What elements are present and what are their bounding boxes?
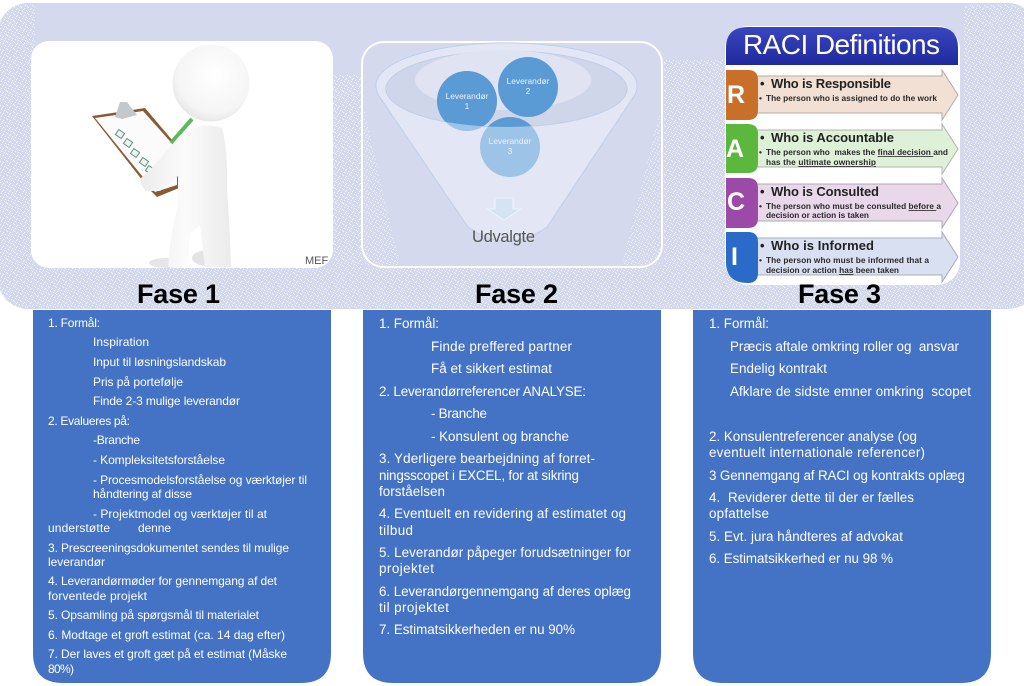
- row: Responsible: •: [759, 93, 762, 103]
- supplier 1 circle: 1: [465, 101, 470, 111]
- panel: Fase 3 text: eventuelt internationale referencer): [709, 445, 925, 460]
- panel: Fase 2 text: Finde preffered partner: [431, 339, 573, 354]
- row: Informed: [726, 232, 958, 283]
- row: Consulted: [726, 178, 958, 228]
- speckled funnel sides: [364, 110, 660, 265]
- funnel opening: [386, 51, 627, 127]
- row: Consulted: The person who must be consulted before a: [766, 201, 941, 211]
- row: Accountable: Who is Accountable: [771, 130, 894, 145]
- supplier 3 circle: 3: [508, 146, 513, 156]
- panel: Fase 1 text: forventede projekt: [48, 589, 148, 603]
- row: Informed: decision or action has been taken: [766, 265, 899, 275]
- panel: Fase 1 text: 5. Opsamling på spørgsmål til materialet: [48, 608, 260, 622]
- panel: Fase 1 text: - Projektmodel og værktøjer til at: [93, 507, 268, 521]
- row: Accountable: has the ultimate ownership: [766, 157, 876, 167]
- supplier 1 circle: Leverandør: [446, 91, 489, 101]
- panel: Fase 1 text: Input til løsningslandskab: [93, 355, 226, 369]
- title: Fase 3: Fase 3: [798, 279, 881, 309]
- row: Consulted: Who is Consulted: [771, 184, 879, 199]
- panel: Fase 2 text: ningsscopet i EXCEL, for at sikring: [379, 468, 579, 483]
- title: Fase 2: Fase 2: [475, 279, 558, 309]
- row: Informed: •: [759, 255, 762, 265]
- panel: Fase 2 text: forståelsen: [379, 484, 445, 499]
- panel: Fase 3 text: 1. Formål:: [709, 316, 769, 331]
- panel: Fase 2 funnel: [362, 42, 662, 267]
- panel: Fase 2 text: Få et sikkert estimat: [431, 361, 552, 376]
- row: Informed: Who is Informed: [771, 238, 874, 253]
- icon: clipboard: [92, 102, 192, 197]
- panel: Fase 1 text: 6. Modtage et groft estimat (ca. 14 dag efter): [48, 628, 285, 642]
- panel: Fase 2 text: - Branche: [431, 406, 487, 421]
- panel: Fase 1 text: leverandør: [48, 555, 105, 569]
- panel: Fase 2 text: 4. Eventuelt en revidering af estimatet og: [379, 506, 626, 521]
- panel: Fase 3 text: 6. Estimatsikkerhed er nu 98 %: [709, 551, 893, 566]
- panel: Fase 1 text: -Branche: [93, 433, 140, 447]
- panel: Fase 2 text: 3. Yderligere bearbejdning af forret-: [379, 451, 595, 466]
- label: Udvalgte: Udvalgte: [472, 228, 535, 246]
- row: Accountable: A: [726, 135, 744, 163]
- panel: Fase 2 text: [363, 310, 661, 683]
- row: Responsible: Who is Responsible: [771, 76, 891, 91]
- supplier 3 circle: [480, 117, 540, 177]
- panel: Fase 1 text: Inspiration: [93, 335, 149, 349]
- row: Accountable: •: [760, 130, 765, 145]
- arrow: down: [487, 198, 521, 220]
- row: Responsible: •: [760, 76, 765, 91]
- panel: Fase 3 text: 4. Reviderer dette til der er fælles: [709, 490, 914, 505]
- row: Accountable: •: [759, 147, 762, 157]
- panel: Fase 2 text: 2. Leverandørreferencer ANALYSE:: [379, 384, 586, 399]
- panel: Fase 3 text: Afklare de sidste emner omkring scopet: [730, 384, 971, 399]
- icon: white figure: [141, 44, 250, 268]
- row: Informed: The person who must be informed that a: [766, 255, 929, 265]
- row: Consulted: •: [760, 184, 765, 199]
- panel: Fase 2 text: til projektet: [379, 600, 449, 615]
- panel: Fase 3 text: Endelig kontrakt: [730, 361, 827, 376]
- supplier 2 circle: Leverandør: [507, 76, 550, 86]
- row: Consulted: decision or action is taken: [766, 210, 869, 220]
- title: Fase 1: Fase 1: [137, 279, 220, 309]
- panel: Fase 1 text: - Procesmodelsforståelse og værktøjer til: [93, 473, 307, 487]
- panel: Fase 1 text: [33, 310, 331, 683]
- panel: Fase 1 illustration: [31, 41, 333, 268]
- panel: Fase 1 text: håndtering af disse: [93, 487, 192, 501]
- panel: Fase 3 text: opfattelse: [709, 506, 769, 521]
- row: Informed: I: [731, 243, 738, 271]
- panel: Fase 2 text: 1. Formål:: [379, 316, 439, 331]
- panel: Fase 1 text: denne: [138, 521, 171, 535]
- panel: Fase 1 text: 80%): [48, 662, 74, 676]
- panel: Fase 1 text: 2. Evalueres på:: [48, 414, 130, 428]
- panel: Fase 2 text: projektet: [379, 561, 434, 576]
- row: Responsible: The person who is assigned to do the work: [766, 93, 937, 103]
- RACI header: [726, 27, 958, 65]
- panel: Fase 1 text: 3. Prescreeningsdokumentet sendes til mulige: [48, 541, 289, 555]
- supplier 2 circle: 2: [526, 86, 531, 96]
- row: Informed: •: [760, 238, 765, 253]
- background banner: [0, 3, 1024, 309]
- panel: Fase 3 text: 2. Konsulentreferencer analyse (og: [709, 429, 917, 444]
- panel: Fase 1 text: 4. Leverandørmøder for gennemgang af det: [48, 574, 278, 588]
- panel: Fase 1 text: Pris på portefølje: [93, 375, 183, 389]
- supplier 1 circle: [437, 71, 497, 131]
- panel: Fase 1 text: 1. Formål:: [48, 316, 100, 330]
- panel: Fase 3 text: 3 Gennemgang af RACI og kontrakts oplæg: [709, 468, 965, 483]
- row: Accountable: [726, 124, 958, 174]
- panel: Fase 2 text: tilbud: [379, 523, 413, 538]
- panel: Fase 2 text: - Konsulent og branche: [431, 429, 569, 444]
- row: Consulted: •: [759, 201, 762, 211]
- panel: Fase 1 text: understøtte: [48, 521, 110, 535]
- row: Responsible: [726, 70, 958, 120]
- panel: Fase 2 text: 6. Leverandørgennemgang af deres oplæg: [379, 584, 631, 599]
- panel: Fase 1 text: Finde 2-3 mulige leverandør: [93, 394, 240, 408]
- row: Responsible: R: [727, 81, 745, 109]
- supplier 3 circle: Leverandør: [489, 136, 532, 146]
- panel: Fase 1 text: 7. Der laves et groft gæt på et estimat (Måske: [48, 647, 287, 661]
- panel: Fase 2 text: 5. Leverandør påpeger forudsætninger for: [379, 545, 632, 560]
- panel: Fase 3 text: 5. Evt. jura håndteres af advokat: [709, 529, 903, 544]
- panel: RACI definitions: [725, 26, 960, 285]
- RACI header: RACI Definitions: [743, 29, 940, 60]
- row: Accountable: The person who makes the final decision and: [766, 147, 948, 157]
- panel: Fase 1 text: - Kompleksitetsforståelse: [93, 453, 225, 467]
- supplier 2 circle: [498, 57, 558, 117]
- speckled inner ellipse: [415, 50, 591, 110]
- watermark: MEF: [305, 255, 328, 267]
- funnel cone: [376, 43, 637, 241]
- row: Consulted: C: [727, 188, 745, 216]
- panel: Fase 3 text: [693, 310, 991, 683]
- panel: Fase 2 text: 7. Estimatsikkerheden er nu 90%: [379, 622, 575, 637]
- panel: Fase 3 text: Præcis aftale omkring roller og ansvar: [730, 339, 960, 354]
